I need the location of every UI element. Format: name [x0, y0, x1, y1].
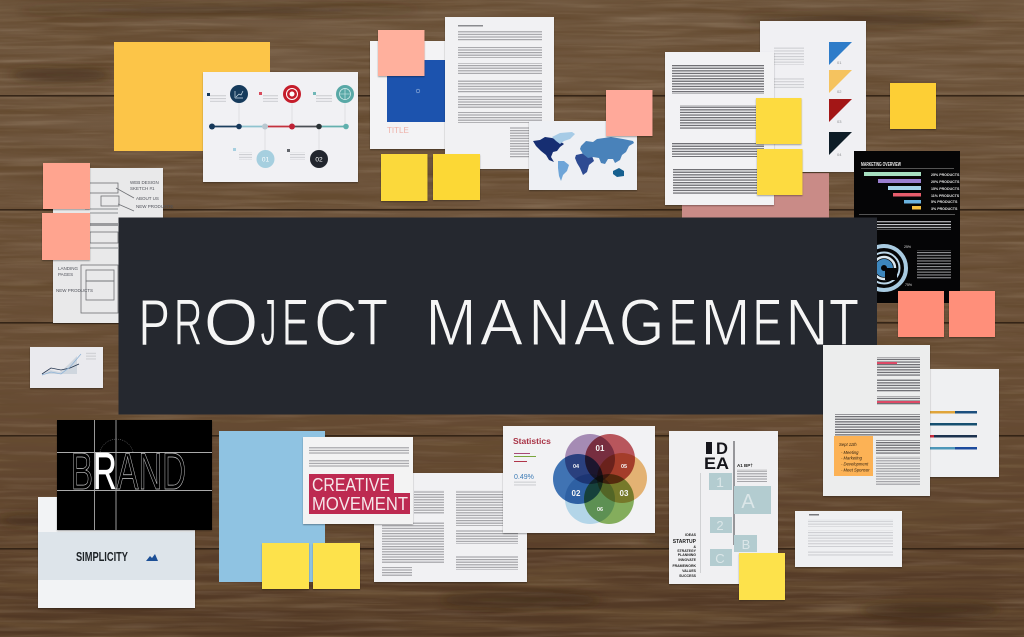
venn diagram [553, 434, 647, 524]
title text: T [357, 285, 388, 359]
step 01 circle: 01 [262, 156, 269, 164]
sticky note: yellow pair top left [381, 154, 428, 201]
title text: R [174, 285, 202, 359]
marketing overview poster: 75% [905, 283, 912, 287]
web design sketch sheet: LANDING [58, 266, 79, 271]
orange sheet [114, 42, 270, 151]
title text: G [619, 285, 664, 359]
web design sketch sheet: ABOUT US [136, 196, 159, 201]
step 02 circle: 02 [315, 156, 323, 164]
idea document: IDEAS [685, 533, 697, 537]
simplicity sheet: SIMPLICITY [76, 550, 128, 564]
idea document: INNOVATE [678, 558, 697, 562]
venn diagram: 03 [620, 489, 629, 498]
web design sketch sheet [53, 168, 173, 323]
icon: target circle [283, 85, 301, 103]
handwritten orange note: - Development [841, 462, 869, 466]
title text: P [138, 285, 170, 359]
triangle chart document: 02 [837, 89, 842, 94]
poster title: TITLE [387, 126, 409, 135]
idea document: EA [704, 455, 729, 473]
web design sketch sheet: NEW PRODUCTS [136, 204, 173, 209]
teal letter blocks [709, 473, 771, 566]
infographic timeline sheet [203, 72, 358, 182]
title text: J [260, 285, 276, 359]
statistics sheet: Statistics [513, 436, 551, 446]
bar chart: 15% PRODUCTS [931, 187, 960, 191]
sticky note: yellow idea [739, 553, 785, 600]
triangle chart document [760, 21, 866, 172]
title text: T [829, 285, 859, 359]
venn diagram: 01 [596, 444, 605, 453]
web design sketch sheet: SKETCH #1 [130, 186, 155, 191]
statistics sheet [503, 426, 655, 533]
sticky note: coral left lower [42, 213, 90, 260]
highlighted text document [823, 345, 930, 496]
sticky note: coral left [898, 291, 944, 337]
title text: E [282, 285, 309, 359]
marketing overview poster [854, 151, 960, 303]
bar chart document [928, 369, 999, 477]
light blue sheet [219, 431, 325, 582]
marketing overview poster: 25% [904, 245, 911, 249]
title text: A [480, 285, 523, 359]
main title banner [118, 218, 877, 414]
small text document [795, 511, 902, 567]
idea document: VALUES [682, 569, 697, 573]
bar chart [864, 172, 960, 211]
map shapes [533, 132, 634, 181]
idea document: 2 [716, 518, 724, 533]
venn diagram: 05 [621, 464, 627, 470]
icon: chart circle [230, 85, 248, 103]
title text [138, 285, 859, 359]
sticky note: coral left upper [43, 163, 90, 209]
text document with bullets [665, 52, 774, 205]
handwritten orange note: Sept 11th [839, 442, 857, 447]
triangles [829, 42, 852, 155]
sticky note: yellow far right [890, 83, 936, 129]
statistics sheet: 0.49% [514, 474, 534, 481]
sticky note: yellow bottom right [313, 543, 360, 589]
title text: N [786, 285, 828, 359]
small line chart sheet [30, 347, 103, 388]
idea document: B [742, 537, 750, 552]
idea document: FRAMEWORK [672, 564, 696, 568]
idea document: STRATEGY [677, 549, 697, 553]
timeline line [209, 124, 349, 130]
sticky note: salmon top [378, 30, 424, 76]
world map sheet [529, 121, 637, 190]
brand poster [57, 420, 212, 530]
donut chart [862, 246, 906, 290]
title text: E [752, 285, 782, 359]
title poster with blue square [370, 41, 448, 149]
sticky note: yellow upper stack [756, 98, 802, 144]
idea document: A1 BP† [737, 463, 753, 468]
bar chart: 3% PRODUCTS [931, 207, 958, 211]
title text: A [574, 285, 615, 359]
donut legend [917, 250, 951, 280]
step 02 circle [310, 150, 328, 168]
triangle chart document: 04 [837, 152, 842, 157]
title text: C [314, 285, 358, 359]
lower text document [374, 473, 527, 582]
web design sketch sheet: NEW PRODUCTS [56, 288, 93, 293]
title text: O [204, 285, 258, 359]
venn diagram: 02 [572, 489, 581, 498]
sticky note: yellow lower stack [757, 149, 802, 195]
handwritten orange note: - Meet Sponsor [841, 468, 870, 472]
simplicity sheet [38, 497, 195, 608]
idea document: C [715, 551, 725, 566]
icon: mountains [146, 554, 158, 561]
title text: M [426, 285, 476, 359]
idea document: & [693, 545, 696, 549]
icon: globe circle [336, 85, 354, 103]
sticky note: yellow pair top right [433, 154, 480, 200]
triangle chart document: 01 [837, 60, 842, 65]
title text: E [669, 285, 697, 359]
handwritten orange note: - Meeting [841, 450, 859, 455]
idea document: SUCCESS [679, 574, 697, 578]
idea document: PLANNING [678, 553, 696, 557]
bar chart: 5% PRODUCTS [931, 200, 958, 204]
web design sketch sheet: WEB DESIGN [130, 180, 159, 185]
marketing overview poster: MARKETING OVERVIEW [861, 162, 901, 168]
brand wordmark: BRAND [71, 443, 186, 501]
title text: N [529, 285, 570, 359]
text document top centre [445, 17, 554, 169]
venn diagram: 06 [597, 507, 603, 513]
triangle chart document: 03 [837, 119, 842, 124]
sticky note: salmon centre [606, 90, 652, 136]
creative movement card: CREATIVE [312, 475, 390, 495]
sticky note: yellow bottom left [262, 543, 309, 589]
sticky note: coral right [949, 291, 995, 337]
web design sketch sheet: PAGES [58, 272, 73, 277]
idea document: STARTUP [673, 539, 697, 545]
bar chart: 20% PRODUCTS [931, 180, 960, 184]
bar chart: 11% PRODUCTS [931, 194, 960, 198]
creative movement card [303, 437, 413, 524]
idea document: D [716, 440, 728, 458]
bar chart: 25% PRODUCTS [931, 173, 960, 177]
venn diagram: 04 [573, 464, 580, 470]
handwritten orange note [834, 436, 873, 476]
idea document: A [741, 491, 755, 513]
rose sheet [682, 173, 829, 219]
creative movement card: MOVEMENT [312, 494, 408, 514]
idea document [669, 431, 778, 584]
title text: M [701, 285, 750, 359]
idea document: 1 [716, 474, 724, 490]
step 01 circle [256, 150, 274, 168]
handwritten orange note: - Marketing [841, 456, 863, 460]
